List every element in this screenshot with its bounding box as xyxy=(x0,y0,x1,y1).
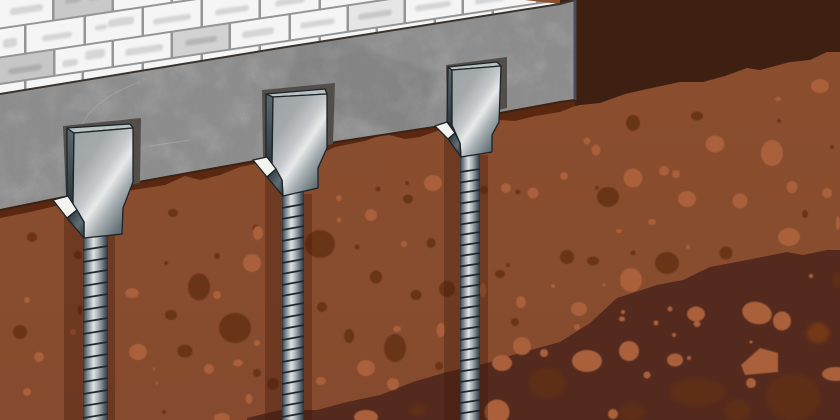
pier shaft 3 xyxy=(460,153,480,420)
recesses cut in concrete xyxy=(63,57,507,197)
pier shaft 1 xyxy=(83,234,108,420)
concrete texture xyxy=(0,11,574,200)
dark excavation at top right xyxy=(523,0,840,108)
bricks: courses xyxy=(0,0,556,97)
pier shaft shadows in soil xyxy=(64,135,488,420)
pier shaft 2 xyxy=(282,192,304,420)
soil: lower dark layer xyxy=(247,250,840,420)
brick wall xyxy=(0,0,560,100)
bracket 1 xyxy=(53,124,133,238)
soil speckles: dark stones xyxy=(13,112,834,414)
bracket 2 xyxy=(253,89,327,196)
soil speckles: light stones xyxy=(23,79,840,420)
soil speckles: subdued patches in lower layer xyxy=(410,272,840,420)
concrete footing xyxy=(0,0,580,215)
brick surface blotches xyxy=(3,0,505,77)
concrete outline edges xyxy=(0,0,575,94)
bracket 3 xyxy=(435,62,501,157)
soil lip under concrete footing xyxy=(0,96,575,218)
